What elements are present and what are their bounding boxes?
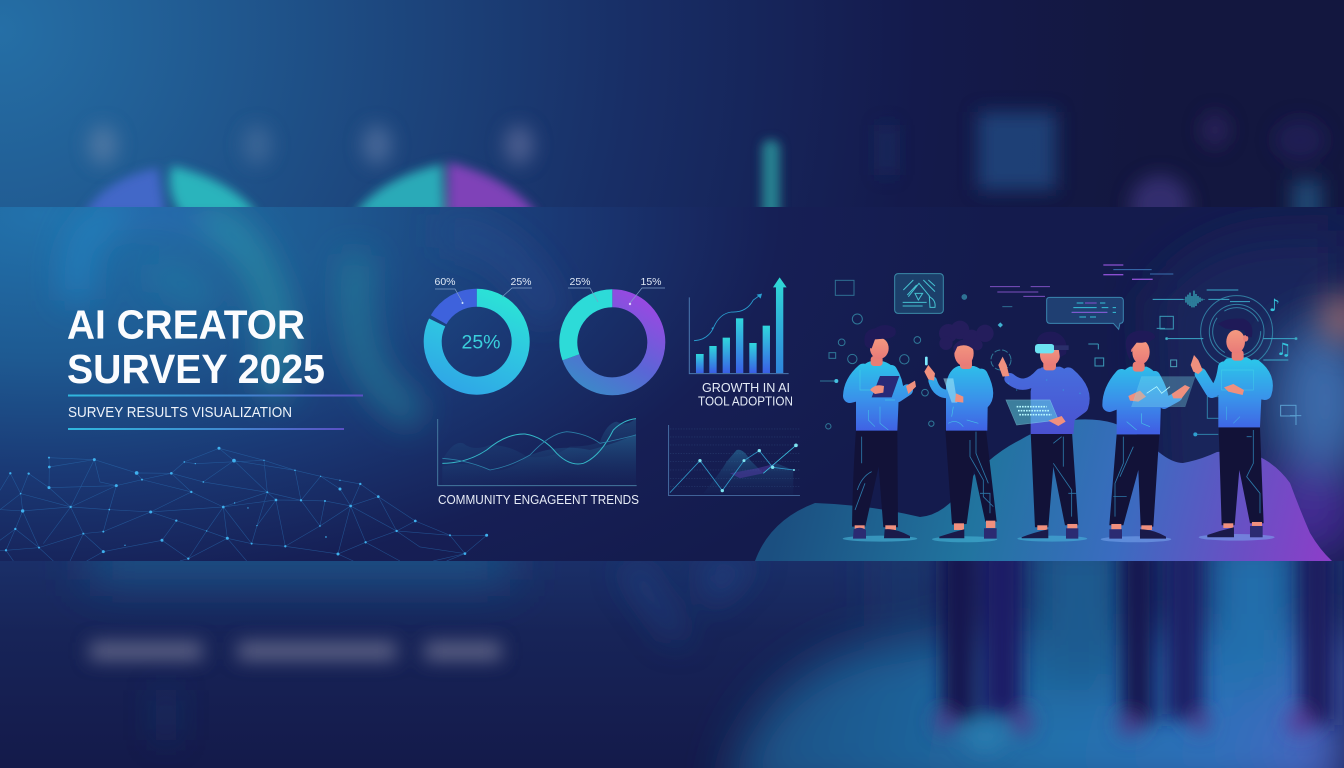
title: SURVEY 2025 (67, 346, 325, 392)
figure 5: person gesturing (1191, 318, 1275, 541)
line chart (669, 425, 800, 496)
figure 1: person with tablet (843, 325, 917, 542)
title rule top (68, 394, 363, 396)
icon: music notes: ♪ (1269, 296, 1280, 316)
bar chart: growth in AI tool adoption (689, 277, 789, 374)
background: blurred rings (77, 211, 550, 415)
donut chart 2 (568, 276, 665, 386)
icon: music notes (1270, 298, 1288, 357)
title rule bottom (68, 428, 344, 430)
figure 3: person with VR headset (998, 332, 1087, 542)
donut chart 1: 60% (434, 276, 456, 288)
subtitle: SURVEY RESULTS VISUALIZATION (68, 404, 292, 421)
bar chart label: TOOL ADOPTION (698, 394, 793, 408)
donut chart 2: 15% (640, 276, 662, 288)
donut chart 1 (433, 276, 532, 386)
donut chart 1: 25% (510, 276, 532, 288)
figure 2: person with stylus (924, 321, 997, 542)
background: orange glow (1320, 292, 1344, 344)
background: hill blob (755, 419, 1332, 561)
bar chart label (698, 383, 792, 406)
floating tech icons left (820, 274, 1050, 429)
figure 4: person with holographic tablet (1101, 331, 1195, 542)
network mesh (0, 447, 488, 561)
panel: blurred top band (0, 0, 1344, 207)
panel: blurred bottom band (0, 530, 1344, 768)
title: AI CREATOR (67, 302, 305, 348)
area chart: community engagement trends (438, 418, 637, 486)
floating tech icons right (1047, 265, 1301, 436)
panel: central banner (0, 207, 1344, 561)
donut chart 1: 25% (461, 332, 501, 354)
icon: music notes: ♫ (1276, 340, 1291, 360)
area chart label: COMMUNITY ENGAGEENT TRENDS (438, 493, 639, 507)
donut chart 2: 25% (569, 276, 591, 288)
title (68, 310, 324, 384)
bar chart label: GROWTH IN AI (702, 381, 790, 395)
background: right glows (1150, 230, 1344, 560)
